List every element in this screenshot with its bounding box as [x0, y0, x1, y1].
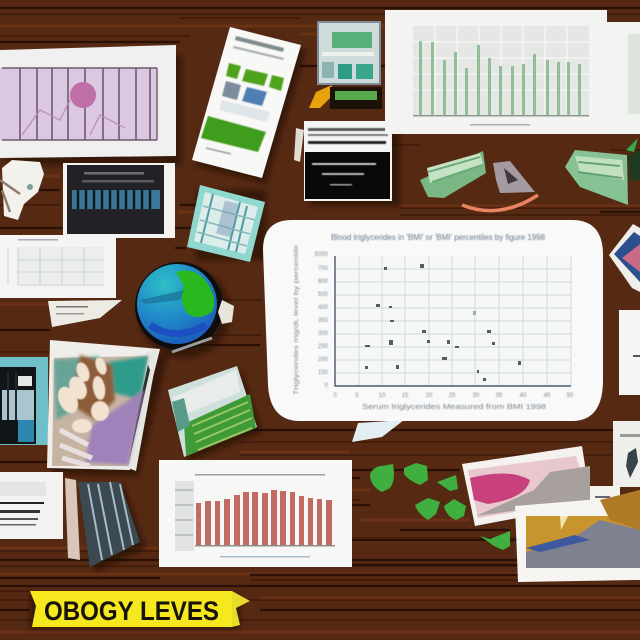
y axis title: Triglycerides mg/dL level by percentile	[293, 244, 300, 395]
y axis labels: 500	[318, 292, 329, 298]
x axis labels: 40	[520, 393, 527, 399]
icon: green leaves	[370, 463, 510, 550]
panel: small note	[48, 300, 122, 327]
y axis labels: 0	[325, 383, 329, 389]
panel: pink photo	[462, 446, 591, 526]
panel: right edge note	[619, 310, 640, 395]
y axis labels: 400	[318, 305, 329, 311]
chart grid	[335, 256, 571, 386]
panel: dark striped booklet	[65, 478, 140, 567]
panel: leaflet with green blocks	[192, 27, 301, 178]
x axis labels: 35	[496, 393, 503, 399]
icon: pink ball	[70, 82, 96, 108]
y axis labels	[315, 252, 329, 389]
x axis labels: 15	[402, 393, 409, 399]
y axis labels: 350	[318, 318, 329, 324]
x axis labels: 10	[379, 393, 386, 399]
icon: green money stack	[420, 151, 486, 198]
panel: purple chart sheet	[0, 45, 176, 158]
panel: main scatter plot speech bubble	[263, 220, 603, 442]
chart title: Blood triglycerides in 'BMI' or 'BMI' percentiles by figure 1998	[331, 232, 545, 242]
panel: orange landscape photo	[515, 490, 640, 582]
panel: small turquoise notebook	[317, 21, 381, 85]
panel: red bar chart sheet	[159, 460, 352, 567]
icon: globe	[135, 262, 234, 352]
panel: blue photo right edge	[609, 224, 640, 292]
x axis labels: 5	[355, 393, 359, 399]
icon: yellow marker	[309, 85, 382, 109]
x axis labels: 50	[567, 393, 574, 399]
x axis labels: 20	[426, 393, 433, 399]
panel: bird note right edge	[613, 421, 640, 487]
icon: green money stack right	[565, 138, 640, 205]
panel: colorful leaf artwork	[47, 340, 160, 471]
x axis labels: 0	[333, 393, 337, 399]
y axis labels: 700	[318, 266, 329, 272]
y axis labels: 150	[318, 370, 329, 376]
x axis labels: 30	[473, 393, 480, 399]
panel: keyboard device	[0, 357, 48, 445]
y axis labels: 600	[318, 279, 329, 285]
y axis labels: 200	[318, 357, 329, 363]
y axis labels: 300	[318, 331, 329, 337]
icon: white crumpled bag	[0, 160, 44, 220]
panel: dark blue photo	[63, 163, 175, 238]
x axis title: Serum triglycerides Measured from BMI 1998	[362, 402, 546, 411]
panel: black notice card	[294, 121, 392, 201]
panel: teal booklet	[187, 185, 265, 262]
y axis labels: 5000	[315, 252, 329, 258]
title banner: OBOGY LEVES	[44, 596, 219, 626]
scatter points	[365, 264, 521, 381]
panel: note behind photos	[585, 486, 620, 520]
panel: top green bar chart	[385, 10, 607, 134]
x axis labels: 25	[449, 393, 456, 399]
x axis labels	[333, 393, 574, 399]
x axis labels: 45	[544, 393, 551, 399]
panel: green table booklet	[168, 366, 257, 457]
icon: tool and red curve	[462, 161, 538, 211]
shadows under objects	[8, 32, 400, 629]
panel: text sheet bottom left	[0, 472, 63, 539]
panel: grid sheet left	[0, 235, 116, 298]
y axis labels: 250	[318, 344, 329, 350]
panel: right edge sheet	[607, 22, 640, 134]
